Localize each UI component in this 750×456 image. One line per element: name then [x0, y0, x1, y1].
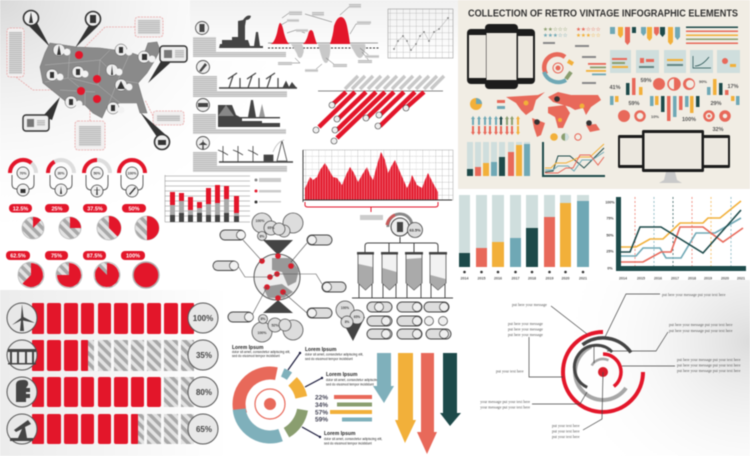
y axis labels: 75% — [606, 216, 614, 220]
radial captions: your message put your text here — [480, 406, 530, 410]
y axis labels — [605, 200, 615, 270]
gray hatched tops — [345, 76, 444, 89]
radial captions: put your text here — [496, 370, 524, 374]
dark framed boxes — [23, 46, 187, 131]
pill knobs — [374, 302, 448, 338]
arrow dark — [440, 353, 461, 426]
globe — [254, 254, 300, 300]
axis — [303, 150, 452, 202]
silo lids — [357, 252, 447, 254]
icon glyphs — [198, 24, 208, 149]
lorem text: sed do eiusmod tempor incididunt — [232, 354, 280, 358]
teal line — [621, 218, 741, 258]
callout text blocks — [9, 20, 180, 146]
small cards — [610, 50, 740, 73]
phone screens — [469, 33, 533, 80]
gauge icons — [20, 186, 136, 195]
oil pumps illustration — [219, 73, 297, 88]
lorem text: Lorem Ipsum — [326, 372, 358, 378]
center dot — [598, 367, 608, 377]
radial captions: put here your message put your text here — [669, 329, 733, 333]
pie bases — [18, 216, 159, 288]
retro percent labels: 17% — [727, 84, 739, 90]
chart: stacked bars with legend — [165, 175, 281, 222]
bubble labels: 65% — [267, 226, 275, 230]
y axis labels: 50% — [606, 234, 614, 238]
panel: US map with callouts — [7, 10, 187, 150]
phones — [467, 24, 535, 89]
icon: wind turbine — [12, 304, 35, 331]
bubble icons — [50, 45, 147, 111]
stars: ★★☆☆☆ — [576, 26, 601, 33]
x axis labels: 2021 — [737, 276, 745, 280]
percent list: 59% — [315, 416, 328, 424]
axes — [268, 42, 378, 44]
bubble labels lower — [258, 317, 279, 335]
grid lines — [165, 175, 250, 222]
pill labels: 75% — [51, 254, 62, 260]
retro percent labels: 32% — [712, 127, 724, 133]
year labels: 2016 — [494, 276, 502, 280]
leader lines — [529, 294, 675, 430]
gauge loops — [12, 175, 143, 190]
arrow teal — [373, 353, 394, 403]
remaining pie base — [133, 262, 159, 288]
panel: red gauges — [10, 160, 145, 197]
world map — [506, 92, 601, 137]
pill circles — [230, 230, 332, 322]
lorem text: sed do eiusmod tempor incididunt — [305, 357, 353, 361]
lorem text: dolor sit amet, consectetur adipiscing elit, — [232, 350, 290, 354]
retro percent labels — [609, 78, 739, 133]
percent list: 57% — [315, 410, 328, 416]
label pills — [213, 230, 346, 322]
red segments row 1 — [32, 303, 194, 334]
pin values — [341, 306, 360, 324]
gauge arcs red — [10, 160, 145, 173]
x axis labels: 2015 — [637, 276, 645, 280]
gauge values: 50% — [93, 172, 101, 176]
top funnel — [263, 240, 293, 255]
chart: red area histogram — [303, 150, 453, 220]
year labels: 2015 — [478, 276, 486, 280]
pill labels — [10, 206, 140, 260]
lorem text: dolor sit amet, consectetur adipiscing elit, — [305, 352, 363, 356]
pill matrix — [367, 302, 451, 339]
retro percent labels: 100% — [682, 117, 696, 123]
panel: energy icons list — [193, 16, 297, 172]
silo bodies — [358, 254, 446, 290]
red segments row 3 — [32, 377, 161, 407]
pill labels: 25% — [51, 206, 63, 212]
vertical up and down bars — [610, 78, 740, 121]
icon: silos — [8, 349, 36, 364]
year labels: 2018 — [528, 276, 536, 280]
small donut — [544, 54, 573, 82]
x axis labels: 2019 — [704, 276, 712, 280]
chart: large line chart — [605, 197, 746, 280]
icon: factory — [16, 380, 30, 402]
year dots — [463, 271, 584, 273]
red segments row 2 — [32, 340, 88, 371]
arrow yellow — [395, 353, 416, 443]
radial captions: put here your message — [508, 333, 543, 337]
dark line — [621, 210, 741, 253]
arrows row — [610, 27, 680, 45]
chart: sine humps — [268, 4, 380, 72]
grid — [303, 150, 453, 200]
pointer lines — [281, 6, 372, 70]
percentage values — [193, 314, 213, 434]
percentage values: 80% — [196, 388, 212, 397]
axes — [616, 197, 746, 271]
pump gauge arc — [388, 214, 412, 227]
pin values: 100% — [341, 306, 349, 310]
bar end caps — [313, 102, 409, 144]
value circle — [408, 222, 422, 238]
chart: large yearly bars — [459, 195, 589, 280]
pointer dots — [299, 352, 323, 438]
y axis labels: 25% — [606, 250, 614, 254]
percent list — [315, 394, 328, 424]
bar fills — [459, 201, 589, 267]
globe red markers — [259, 253, 294, 301]
legend — [254, 178, 281, 204]
red area — [305, 152, 438, 200]
coal and oil rig illustration — [218, 100, 280, 127]
small pies above chart — [550, 133, 581, 141]
percentage values: 100% — [193, 314, 213, 323]
pin values: 65% — [354, 315, 360, 319]
year labels — [460, 276, 587, 280]
top bubbles — [252, 213, 303, 240]
map markers — [524, 96, 592, 126]
x axis labels: 2016 — [654, 276, 662, 280]
red segments row 4 — [32, 414, 138, 444]
text blocks — [193, 37, 287, 172]
red segments — [170, 185, 239, 213]
bubble labels lower: 8% — [260, 317, 266, 321]
stars: ★★★☆☆ — [576, 32, 601, 39]
hump labels — [278, 4, 379, 72]
wind farm illustration — [218, 140, 293, 162]
retro percent labels: 90% — [699, 79, 707, 84]
monitors — [618, 130, 730, 183]
horizontal stripes — [686, 26, 738, 44]
panel: progress bars — [7, 303, 218, 444]
figure arrows down — [471, 126, 520, 135]
percentage pills — [6, 204, 146, 260]
box content — [27, 50, 184, 127]
donut segments — [239, 372, 302, 437]
figure arrows up — [471, 116, 520, 125]
bar backgrounds hatched — [81, 340, 194, 444]
panel background — [458, 0, 750, 189]
percent list: 22% — [315, 394, 328, 402]
retro percent labels: 29% — [710, 101, 722, 107]
radial captions: your message put your text here — [480, 400, 530, 404]
lorem text: dolor sit amet, consectetur adipiscing elit, — [326, 378, 384, 382]
bubble labels: 100% — [256, 219, 265, 223]
stars — [543, 26, 601, 39]
yellow line — [621, 201, 741, 247]
stars: ★★☆☆☆ — [543, 26, 568, 33]
pin values: 8% — [345, 320, 349, 324]
bar separators — [305, 150, 438, 200]
pin — [336, 301, 365, 341]
pointers — [288, 353, 322, 437]
connectors — [27, 21, 170, 137]
gauge values: 30% — [57, 172, 65, 176]
year labels: 2021 — [579, 276, 587, 280]
x axis labels: 2018 — [688, 276, 696, 280]
radial captions: put your text here — [552, 430, 580, 434]
gauge values — [19, 172, 137, 176]
lorem text: dolor sit amet, consectetur adipiscing elit, — [324, 437, 382, 441]
panel: retro vintage infographic — [458, 0, 750, 189]
chart: retro donut with arrows — [232, 345, 384, 446]
radial captions: put here your message put your text here — [677, 364, 741, 368]
lorem text — [232, 345, 384, 446]
bracket label — [360, 215, 383, 220]
bar backgrounds — [459, 195, 589, 267]
connector lines — [238, 240, 322, 317]
small pie and pills — [470, 98, 505, 110]
silo legs and floor — [352, 284, 453, 298]
x axis labels: 2017 — [671, 276, 679, 280]
lorem text: Lorem Ipsum — [324, 431, 356, 437]
x axis labels — [619, 276, 745, 280]
state borders — [45, 48, 138, 106]
y axis labels: 100% — [605, 200, 615, 204]
retro percent labels: 10% — [651, 114, 659, 119]
bracket — [305, 202, 438, 212]
y axis labels: 0% — [607, 266, 613, 270]
bubble side pills — [56, 48, 156, 114]
percentage values: 65% — [196, 425, 212, 434]
year labels: 2014 — [460, 276, 468, 280]
retro pies — [618, 78, 729, 122]
year labels: 2020 — [562, 276, 570, 280]
pill labels: 62.5% — [10, 254, 26, 260]
bubble labels lower: 100% — [258, 331, 267, 335]
small donut center — [556, 66, 560, 70]
panel: percentage pies — [6, 204, 159, 288]
continents — [263, 258, 299, 298]
red pie sectors — [22, 216, 159, 287]
retro percent labels: 59% — [628, 101, 640, 107]
icon circles — [196, 22, 210, 150]
year labels: 2019 — [546, 276, 554, 280]
card contents — [612, 56, 736, 68]
lorem text: sed do eiusmod tempor incididunt — [326, 382, 374, 386]
bubble labels — [256, 219, 275, 238]
gauge dials — [17, 167, 138, 197]
grid — [388, 9, 453, 58]
radial captions: put your text here — [552, 435, 580, 439]
pump circle — [391, 218, 409, 236]
radial captions: put here your message — [508, 328, 543, 332]
silo fill — [358, 258, 446, 290]
icon: oil pump — [10, 420, 33, 441]
red bars — [319, 92, 424, 138]
pill labels: 50% — [128, 206, 140, 212]
x axis labels: 2020 — [721, 276, 729, 280]
bubble labels lower: 52% — [271, 324, 279, 328]
radial captions: put here your message put your text here — [662, 293, 726, 297]
plot line — [394, 18, 448, 50]
panel: globe with funnels — [213, 213, 346, 342]
value: 63.5% — [409, 228, 421, 233]
donut center — [264, 398, 276, 410]
arrow red — [417, 353, 437, 454]
red markers — [75, 51, 101, 103]
stars: ★★★☆☆ — [543, 32, 568, 39]
red line — [621, 227, 743, 262]
retro percent labels: 59% — [640, 78, 652, 84]
small bar chart — [467, 142, 530, 176]
bottom bubbles — [252, 314, 303, 342]
x axis labels: 2014 — [619, 276, 627, 280]
dashed axis — [268, 47, 380, 49]
lorem text: Lorem Ipsum — [232, 345, 264, 351]
lorem text: Lorem Ipsum — [305, 347, 337, 353]
pill labels: 37.5% — [87, 206, 103, 212]
radial captions: put here your message put your text here — [677, 358, 741, 362]
icon and value circles — [7, 303, 218, 444]
percentage values: 35% — [196, 351, 212, 360]
dark segments — [170, 213, 239, 222]
percent list: 34% — [315, 402, 328, 409]
gauge values: 100% — [128, 172, 137, 176]
resource bubbles — [46, 44, 150, 114]
pink callouts — [7, 17, 184, 150]
small line chart — [543, 142, 605, 176]
bottom funnel — [263, 300, 293, 313]
bubble labels: 8% — [259, 234, 265, 238]
gray humps — [291, 44, 366, 63]
donut captions — [543, 42, 596, 84]
chart: radial rings — [480, 293, 741, 439]
gauge red arc — [387, 215, 395, 225]
dashed verticals — [635, 197, 731, 266]
pump icon — [397, 222, 403, 232]
radial captions: put here your message put your text here — [669, 323, 733, 327]
radial captions — [480, 293, 741, 439]
icon glyphs — [29, 12, 166, 145]
gray segments — [170, 199, 239, 216]
map of the USA — [40, 42, 160, 118]
icon circles — [24, 10, 170, 150]
year labels: 2017 — [512, 276, 520, 280]
percent bars — [330, 395, 372, 422]
points — [393, 17, 449, 51]
chart: diagonal bars — [313, 76, 444, 144]
baseline — [318, 90, 443, 92]
radial captions: put here your message — [512, 303, 547, 307]
red humps — [270, 17, 350, 44]
radial captions: put here your message put your text here — [677, 369, 741, 373]
radial captions: put here your message — [508, 322, 543, 326]
lorem text: sed do eiusmod tempor incididunt — [324, 442, 372, 446]
radial captions: put your text here — [552, 424, 580, 428]
rings — [563, 332, 643, 412]
arrows: retro down arrows — [373, 353, 461, 454]
donut legend bars — [586, 63, 606, 75]
pipes — [365, 237, 438, 252]
pill labels: 100% — [126, 254, 140, 260]
panel: silos — [336, 214, 453, 341]
gauge values: 70% — [19, 172, 27, 176]
pill labels: 12.5% — [13, 206, 28, 212]
factory illustration — [219, 16, 263, 48]
pill labels: 87.5% — [87, 254, 102, 260]
chart: dot grid line — [388, 9, 453, 58]
segment gaps on hatched area — [94, 340, 181, 444]
retro percent labels: 41% — [609, 85, 621, 91]
gauge arcs gray — [10, 160, 145, 173]
